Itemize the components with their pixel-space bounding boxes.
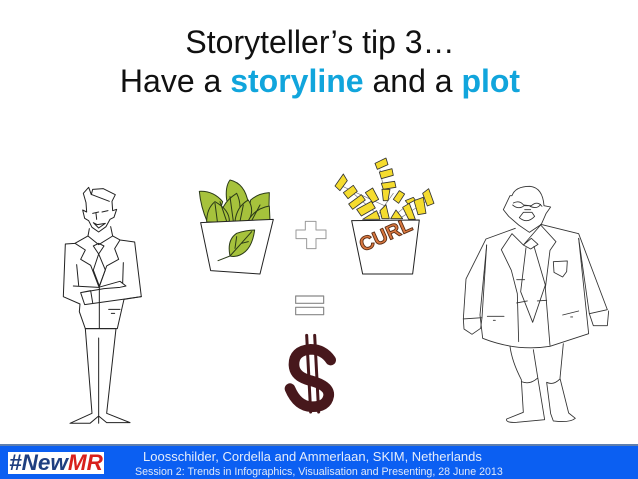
footer line: session: Session 2: Trends in Infographics, Visualisation and Presenting, 28 June 2013	[135, 466, 503, 478]
icon: dollar sign	[290, 335, 331, 412]
pot	[201, 219, 273, 274]
icon: bowl of yellow curls	[335, 158, 434, 274]
footer line: authors: Loosschilder, Cordella and Ammerlaan, SKIM, Netherlands	[143, 449, 482, 464]
icon: salad bowl with green leaves	[199, 180, 273, 274]
icon: stout man with glasses	[463, 186, 609, 422]
leaves	[199, 180, 270, 222]
icon: thin man with crossed arms	[63, 187, 141, 423]
curls	[335, 158, 434, 219]
title: Storyteller’s tip 3…	[185, 24, 455, 60]
single leaf	[218, 230, 255, 261]
title	[120, 24, 520, 98]
title: Have a storyline and a plot	[120, 62, 520, 98]
icon: equals sign	[296, 296, 324, 315]
label: CURL: CURL	[356, 214, 416, 257]
icon: plus sign	[296, 221, 326, 249]
logo: #NewMR: #NewMR	[9, 450, 103, 475]
pot	[352, 220, 419, 274]
footer bar	[0, 444, 638, 479]
